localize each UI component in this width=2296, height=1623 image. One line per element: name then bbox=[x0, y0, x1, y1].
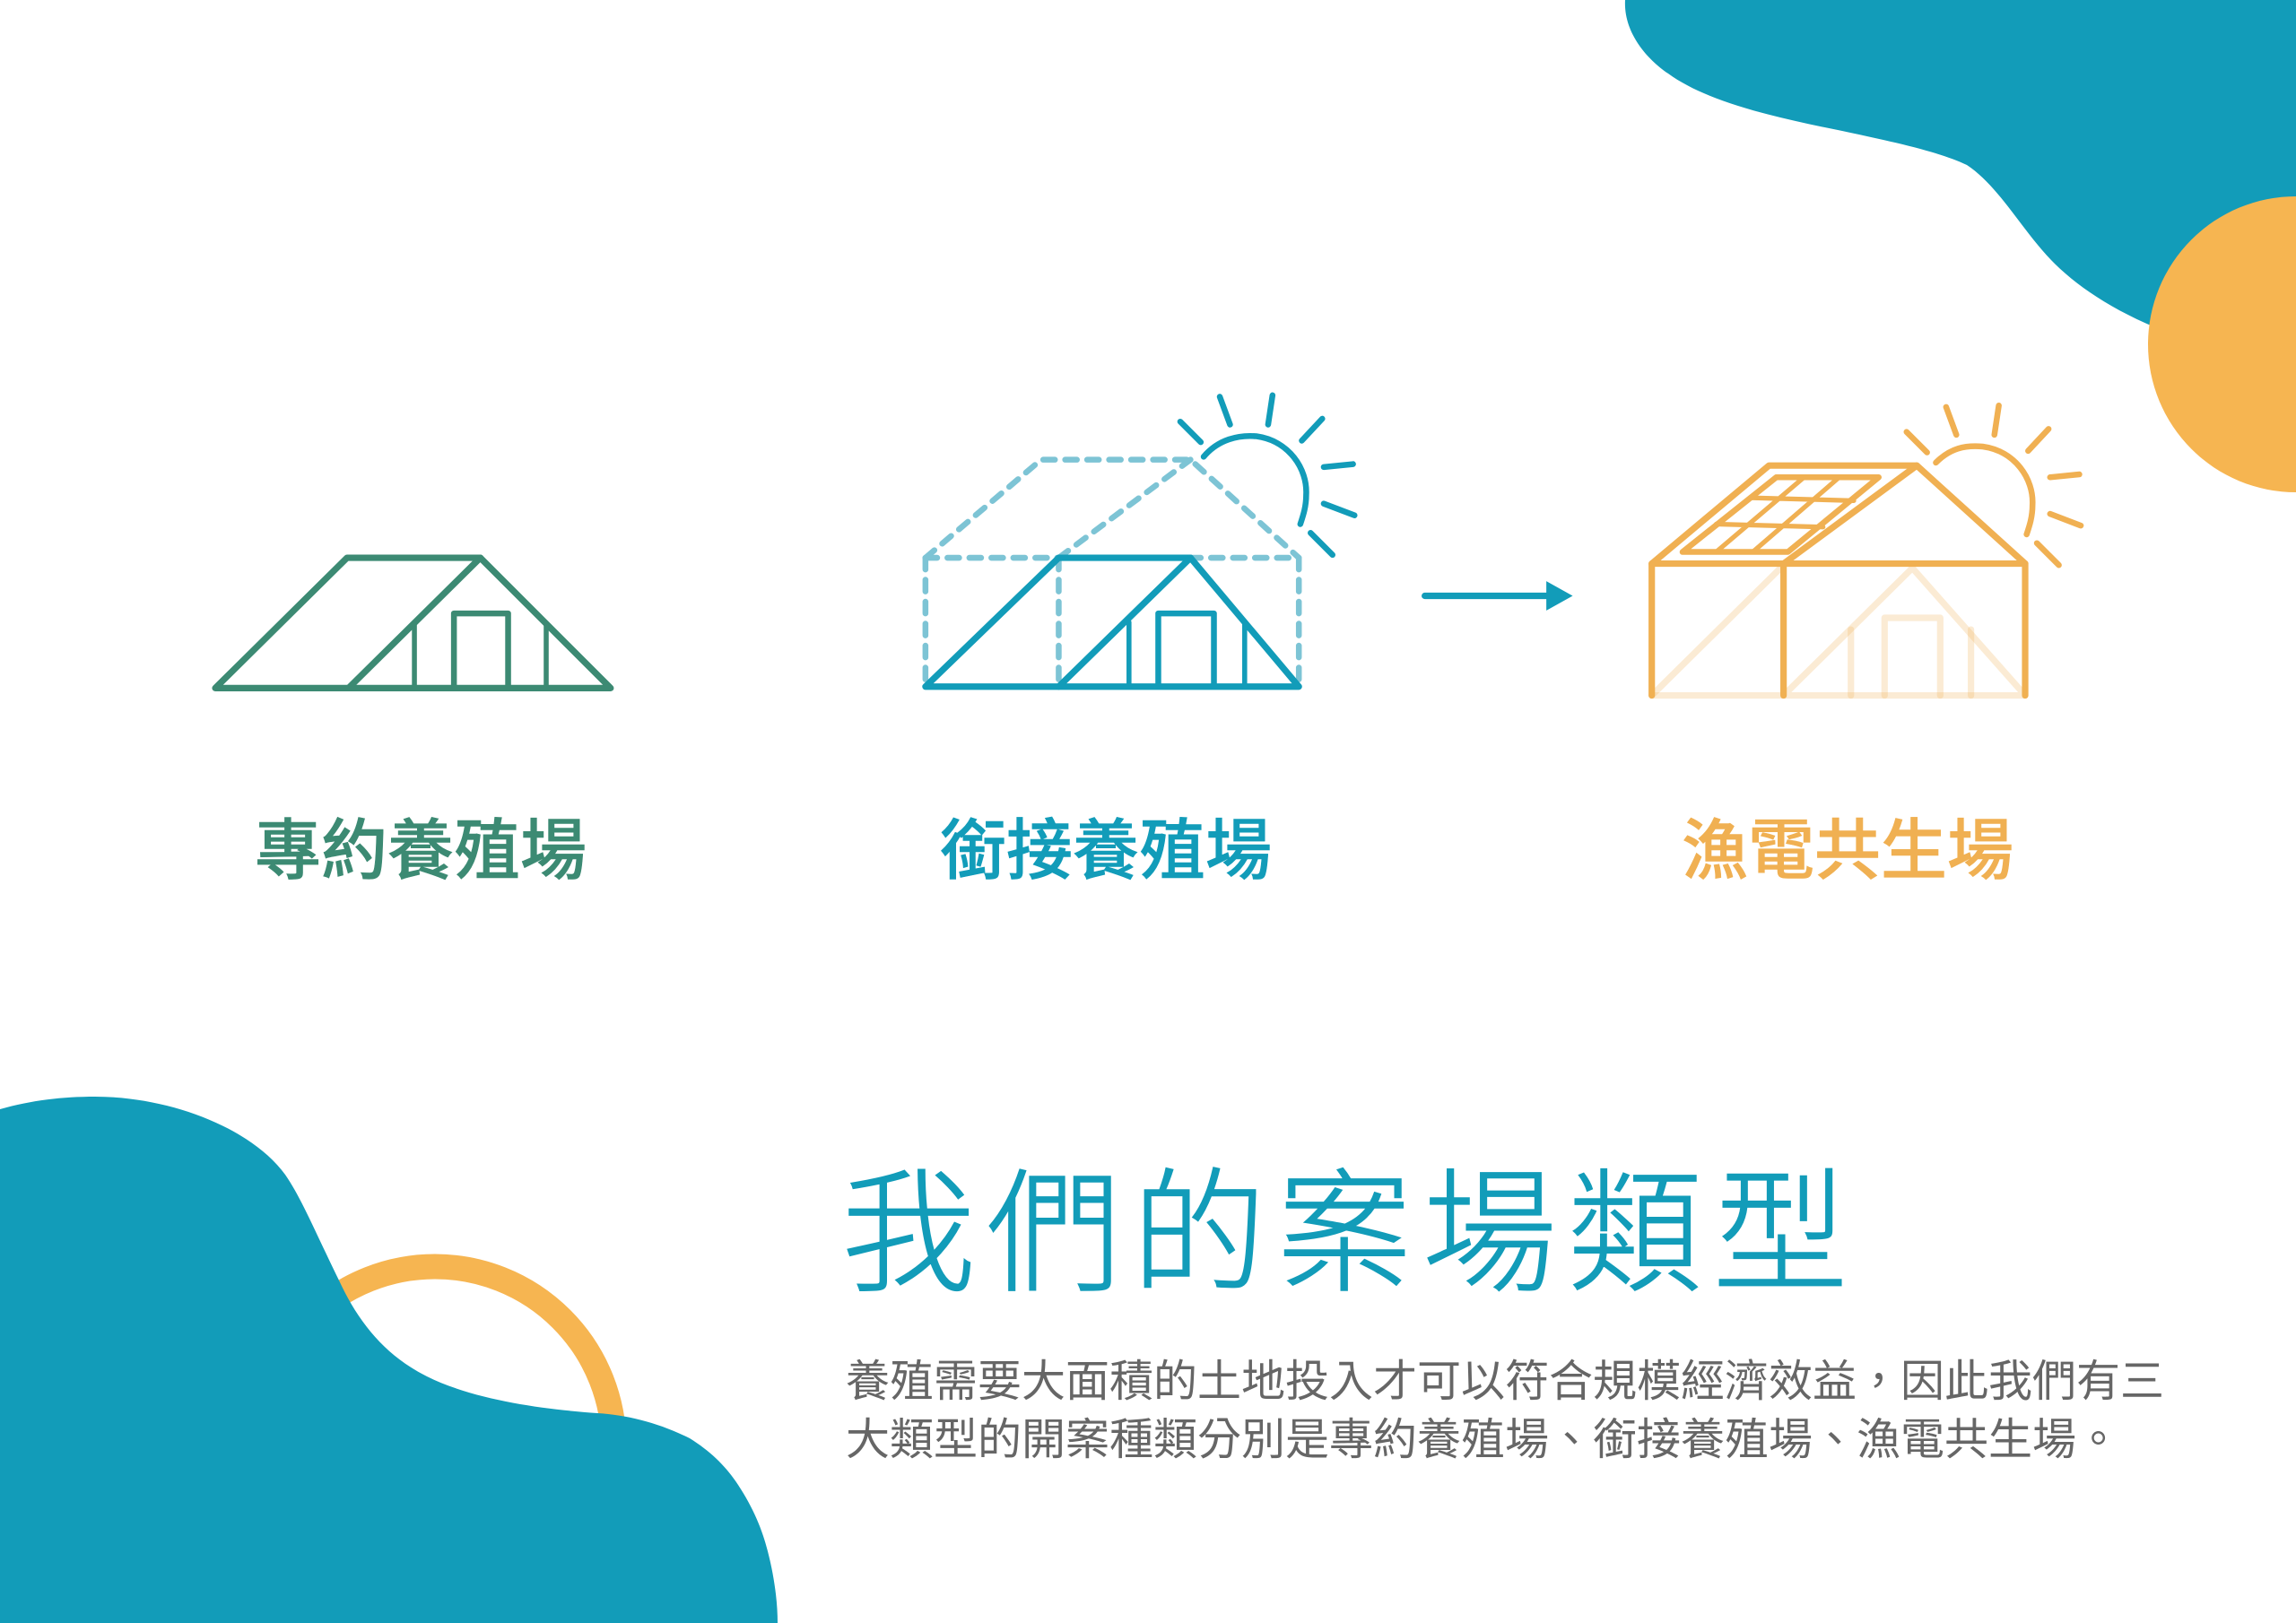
icon: fish farm house (green) bbox=[215, 558, 611, 688]
dashed greenhouse outline bbox=[926, 460, 1299, 687]
body text bbox=[846, 1358, 2164, 1464]
sun bbox=[1180, 395, 1354, 555]
body text: 養殖需要大面積的土地投入才可以符合規模經濟效益，因此我們有三 bbox=[846, 1358, 2164, 1406]
arrow bbox=[1425, 581, 1573, 611]
icon: solar fish farm house (orange) bbox=[1652, 405, 2081, 696]
solar panel bbox=[1683, 477, 1879, 552]
solid house bbox=[926, 558, 1299, 687]
faded inner house bbox=[1652, 568, 2025, 696]
body text: 大類型的開案種類分別是專約養殖場、銜接養殖場、漁電共生場。 bbox=[846, 1416, 2120, 1464]
decorative blob: bottom left bbox=[0, 1097, 778, 1623]
label: 漁電共生場: 漁電共生場 bbox=[1682, 813, 2013, 888]
title: 我們的案場類型 bbox=[841, 1159, 1858, 1309]
label: 專約養殖場: 專約養殖場 bbox=[255, 813, 587, 888]
label: 銜接養殖場: 銜接養殖場 bbox=[940, 813, 1272, 888]
decorative circle: orange bbox=[2148, 196, 2296, 492]
decorative blob: top right bbox=[1625, 0, 2296, 359]
sun bbox=[1907, 405, 2081, 565]
icon: connecting farm house with sun (teal) bbox=[926, 395, 1354, 687]
decorative ring: orange bbox=[257, 1266, 613, 1623]
walls and roof bbox=[1652, 465, 2025, 696]
